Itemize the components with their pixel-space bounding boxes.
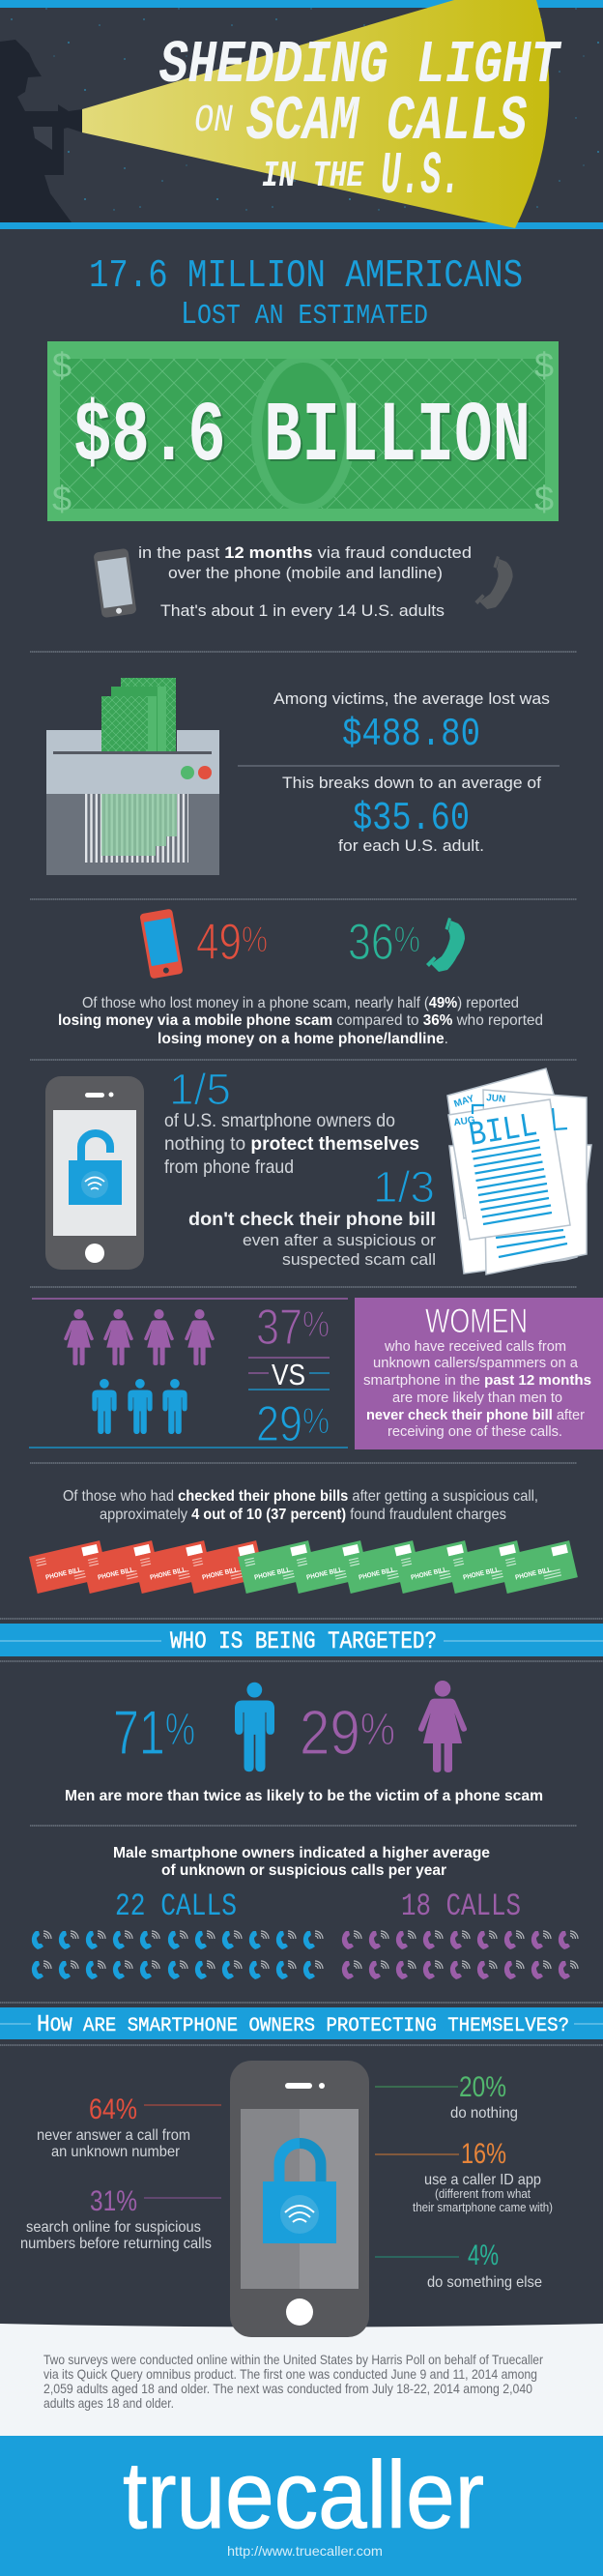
stat: 16%	[375, 2138, 553, 2214]
panel: women vs men comparison	[29, 1299, 348, 1452]
icon: green handset	[426, 918, 465, 972]
pictogram: 18 calls: 18 CALLS	[401, 1888, 521, 1924]
illustration: stack of bills: BILL	[466, 1106, 540, 1156]
headline: 17.6 million Americans	[89, 254, 523, 333]
header panel	[0, 0, 603, 229]
mobile vs landline percentages: 36	[348, 914, 405, 971]
text: past 12 months	[138, 543, 472, 620]
average lost stats	[238, 689, 560, 855]
stat: 16%: (different from what	[435, 2186, 531, 2201]
title: U.S.	[381, 142, 461, 211]
pictogram: 22 calls: 22 CALLS	[115, 1888, 237, 1924]
text: men more likely: Men are more than twice as likely to be the victim of a phone scam	[65, 1788, 543, 1804]
stat: 16%: 16%	[461, 2138, 506, 2170]
average lost stats: $488.80	[342, 713, 480, 757]
gender split stats: %	[165, 1703, 195, 1754]
pictogram: phone bill envelopes: PHONE BILL	[359, 1566, 396, 1582]
title	[159, 31, 562, 211]
panel: women callout: smartphone in the past 12 months	[363, 1372, 591, 1389]
pictogram: 22 calls	[32, 1888, 323, 1979]
pictogram: phone bill envelopes: PHONE BILL	[306, 1566, 344, 1582]
text: past 12 months: in the past 12 months via fraud conducted	[138, 543, 472, 562]
gender split stats: 71	[113, 1697, 183, 1768]
stat: 1/3: even after a suspicious or	[243, 1231, 436, 1249]
average lost stats: for each U.S. adult.	[338, 836, 484, 855]
dollar bill banner: $	[52, 479, 72, 518]
stat: 16%: use a caller ID app	[424, 2172, 541, 2188]
text: fraudulent charges	[63, 1488, 538, 1523]
text: fraudulent charges: approximately 4 out of 10 (37 percent) found fraudulent charges	[100, 1507, 506, 1523]
phone with locked padlock	[230, 2061, 369, 2337]
pictogram: phone bill envelopes	[29, 1540, 578, 1594]
stat: 64%: 64%	[89, 2093, 137, 2125]
mobile vs landline percentages: %	[394, 920, 420, 960]
website url: http://www.truecaller.com	[227, 2543, 383, 2559]
panel: women callout: receiving one of these calls.	[388, 1423, 562, 1440]
text: male smartphone owners: Male smartphone owners indicated a higher average	[113, 1845, 490, 1861]
panel: women vs men comparison: 37	[256, 1300, 312, 1356]
panel: women vs men comparison: %	[302, 1401, 330, 1442]
icon: lock	[263, 2143, 336, 2243]
pictogram: phone bill envelopes: PHONE BILL	[411, 1566, 448, 1582]
section banner: who is being targeted: WHO IS BEING TARGETED?	[170, 1627, 437, 1655]
pictogram: women	[64, 1309, 215, 1365]
pictogram: phone bill envelopes: PHONE BILL	[202, 1566, 240, 1582]
text: past 12 months: That's about 1 in every 14 U.S. adults	[160, 601, 445, 620]
pictogram: men	[92, 1379, 187, 1434]
title: IN THE	[262, 156, 364, 197]
panel: women vs men comparison: VS	[272, 1358, 305, 1391]
panel: women callout: never check their phone bill after	[366, 1407, 585, 1423]
text: male smartphone owners: of unknown or suspicious calls per year	[161, 1862, 446, 1879]
stat: 64%	[37, 2093, 221, 2160]
headline: 17.6 million Americans: 17.6 MILLION AMERICANS	[89, 254, 523, 299]
average lost stats: $35.60	[353, 797, 470, 841]
paragraph: mobile vs landline: losing money via a mobile phone scam compared to 36% who reported	[58, 1012, 543, 1029]
icon: woman	[418, 1681, 467, 1772]
mobile vs landline percentages: %	[242, 920, 268, 960]
average lost stats: Among victims, the average lost was	[273, 689, 550, 708]
text: fraudulent charges: Of those who had checked their phone bills after getting a suspicious call,	[63, 1488, 538, 1505]
stat: 1/5	[164, 1065, 419, 1178]
stat: 1/3: 1/3	[373, 1162, 435, 1212]
icon: man	[235, 1683, 274, 1771]
stat: 31%: 31%	[90, 2185, 137, 2217]
stat: 4%	[375, 2239, 542, 2291]
pictogram: phone bill envelopes: PHONE BILL	[150, 1566, 187, 1582]
stat: 31%	[20, 2185, 221, 2252]
methodology note: adults ages 18 and older.	[43, 2395, 174, 2411]
paragraph: mobile vs landline: losing money on a home phone/landline.	[158, 1031, 448, 1047]
stat: 1/3	[188, 1162, 436, 1269]
dollar bill banner: $	[534, 479, 554, 518]
icon: open lock	[69, 1133, 122, 1205]
panel: women callout: are more likely than men to	[392, 1390, 562, 1406]
shredder illustration	[46, 678, 219, 875]
stat: 31%: search online for suspicious	[26, 2219, 201, 2236]
text: past 12 months: over the phone (mobile and landline)	[168, 564, 443, 582]
headline: 17.6 million Americans: LOST AN ESTIMATED	[181, 297, 428, 333]
methodology note: via its Quick Query omnibus product. The first one was conducted June 9 and 11, 2014 among	[43, 2366, 537, 2382]
panel: women callout: unknown callers/spammers on a	[373, 1355, 579, 1371]
stat: 1/5: of U.S. smartphone owners do	[164, 1111, 395, 1131]
methodology note	[43, 2352, 543, 2411]
illustration: stack of bills: MAY	[453, 1094, 476, 1110]
pictogram: 18 calls	[342, 1888, 578, 1979]
stat: 1/5: 1/5	[169, 1065, 231, 1114]
phone with open padlock	[45, 1076, 144, 1270]
stat: 1/5: from phone fraud	[164, 1157, 294, 1178]
illustration: stack of bills	[447, 1068, 591, 1274]
pictogram: phone bill envelopes: PHONE BILL	[254, 1566, 292, 1582]
stat: 20%: 20%	[459, 2071, 506, 2103]
stat: 16%: their smartphone came with)	[413, 2200, 553, 2214]
pictogram: phone bill envelopes: PHONE BILL	[98, 1566, 135, 1582]
stat: 64%: never answer a call from	[37, 2127, 190, 2144]
pictogram: phone bill envelopes: PHONE BILL	[45, 1566, 83, 1582]
panel: women vs men comparison: 29	[256, 1396, 312, 1452]
icon: red mobile phone	[139, 909, 184, 979]
section banner: how are smartphone owners protecting themselves: HOW ARE SMARTPHONE OWNERS PROTECTING THEMSELVES?	[37, 2012, 569, 2038]
average lost stats: This breaks down to an average of	[282, 774, 541, 792]
dollar bill banner	[47, 341, 559, 521]
paragraph: mobile vs landline: Of those who lost money in a phone scam, nearly half (49%) reported	[82, 995, 519, 1011]
paragraph: mobile vs landline	[58, 995, 543, 1047]
pictogram: phone bill envelopes: PHONE BILL	[463, 1566, 501, 1582]
stat: 20%: do nothing	[450, 2105, 518, 2122]
title: ON	[194, 100, 233, 143]
illustration: stack of bills: JUN	[486, 1093, 506, 1105]
flashlight beam	[82, 0, 549, 228]
stat: 20%	[375, 2071, 518, 2122]
stat: 4%: do something else	[427, 2274, 542, 2291]
section banner: how are smartphone owners protecting themselves	[0, 2003, 603, 2045]
panel: women callout	[355, 1298, 603, 1449]
stat: 64%: an unknown number	[51, 2144, 181, 2160]
illustration: stack of bills: AUG	[453, 1115, 476, 1128]
panel: women callout: WOMEN	[425, 1303, 528, 1340]
truecaller logo: truecaller	[123, 2442, 484, 2548]
panel: women vs men comparison: %	[302, 1304, 330, 1345]
gender split stats: 29	[300, 1697, 369, 1768]
stat: 1/3: don't check their phone bill	[188, 1210, 436, 1230]
text: male smartphone owners	[113, 1845, 490, 1879]
footer panel	[0, 2324, 603, 2576]
panel: women callout: who have received calls from	[384, 1338, 566, 1355]
stat: 1/3: suspected scam call	[282, 1250, 436, 1269]
gender split stats: %	[360, 1703, 395, 1754]
mobile vs landline percentages: 49	[196, 914, 253, 971]
mobile vs landline percentages	[139, 909, 465, 979]
icon: landline handset	[474, 556, 513, 609]
stat: 1/5: nothing to protect themselves	[164, 1134, 419, 1155]
section banner: who is being targeted	[0, 1619, 603, 1661]
methodology note: 2,059 adults aged 18 and older. The next was conducted from July 18-22, 2014 among 2,040	[43, 2381, 532, 2396]
stat: 31%: numbers before returning calls	[20, 2236, 212, 2252]
dollar bill banner: $	[534, 345, 554, 385]
pictogram: phone bill envelopes: PHONE BILL	[515, 1566, 553, 1582]
gender split stats	[113, 1681, 467, 1772]
dollar bill banner: $	[52, 345, 72, 385]
silhouette of person with flashlight	[0, 40, 82, 222]
stat: 4%: 4%	[468, 2239, 499, 2271]
icon: mobile phone	[93, 548, 137, 618]
